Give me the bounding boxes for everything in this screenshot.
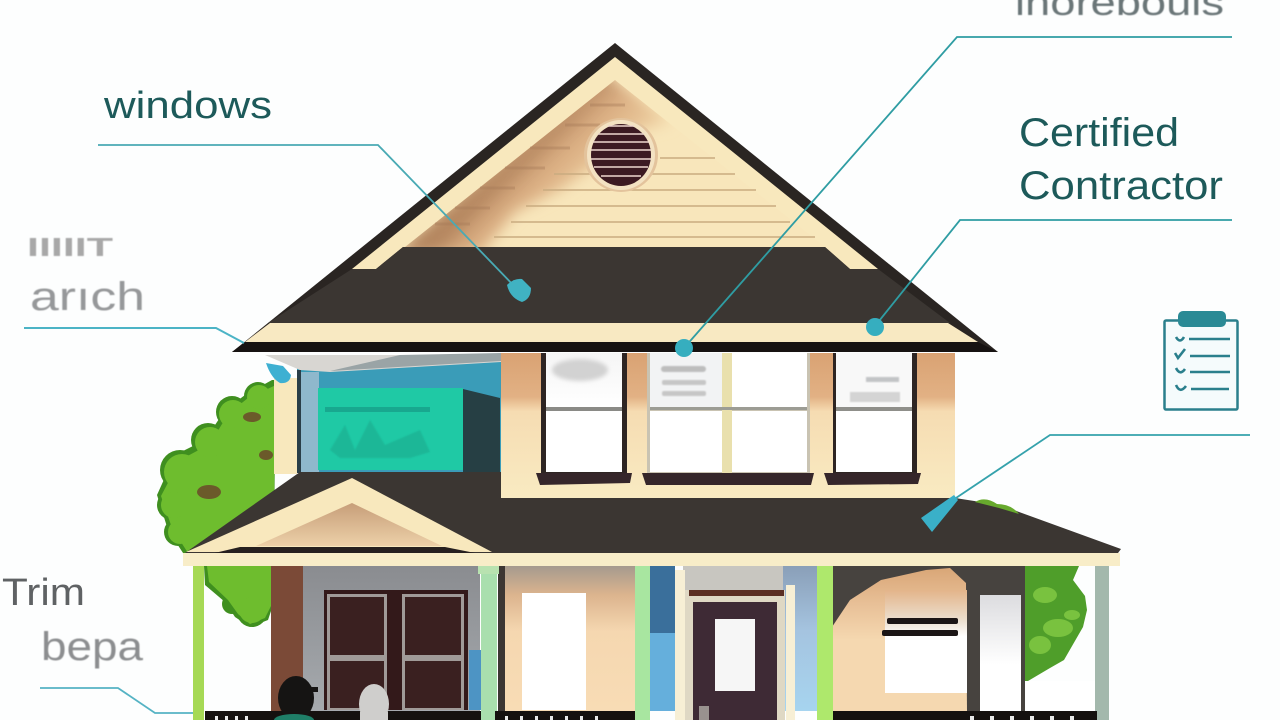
left tree [157,380,276,627]
label: bepa garbled: bepa [41,625,144,669]
label: certified contractor: Contractor [1019,164,1223,208]
leader line: certified contractor [866,220,1232,336]
leader line: trim [40,688,193,713]
lower floor [271,566,1096,720]
double door [324,590,468,710]
porch fascia [183,553,1120,566]
porch gable [186,478,492,556]
leader line: windows [98,145,531,302]
tan wall with window [498,566,636,711]
porch columns [193,566,1109,720]
label: certified contractor: Certified [1019,111,1179,155]
upper wall [501,353,955,499]
leader line: top right [675,37,1232,357]
porch railing [205,711,1097,720]
icon: round attic vent [584,118,658,192]
gable siding and vent [405,80,815,247]
leader line: arch [24,328,291,383]
upper roof [232,43,998,352]
label: trim: Trim [2,572,85,614]
upper windows [536,353,921,485]
right bush [1024,566,1087,681]
label: faded upper left garbled: IIIIIT [27,232,113,262]
window 2 [642,353,814,485]
label: arch garbled: arıch [30,275,145,319]
eave shadow band [232,342,998,352]
right section with windows [832,566,1096,711]
label: certified contractor [1019,111,1223,208]
central entry [650,566,821,720]
left section brick and gray wall [271,566,484,711]
icon: clipboard checklist [1164,311,1238,410]
leader line: porch roof [921,435,1250,532]
label: windows: windows [103,85,272,127]
porch roof [185,472,1121,556]
figures on porch [274,676,389,720]
window 1 [536,353,632,485]
window 3 [824,353,921,485]
upper left teal room [265,353,501,474]
